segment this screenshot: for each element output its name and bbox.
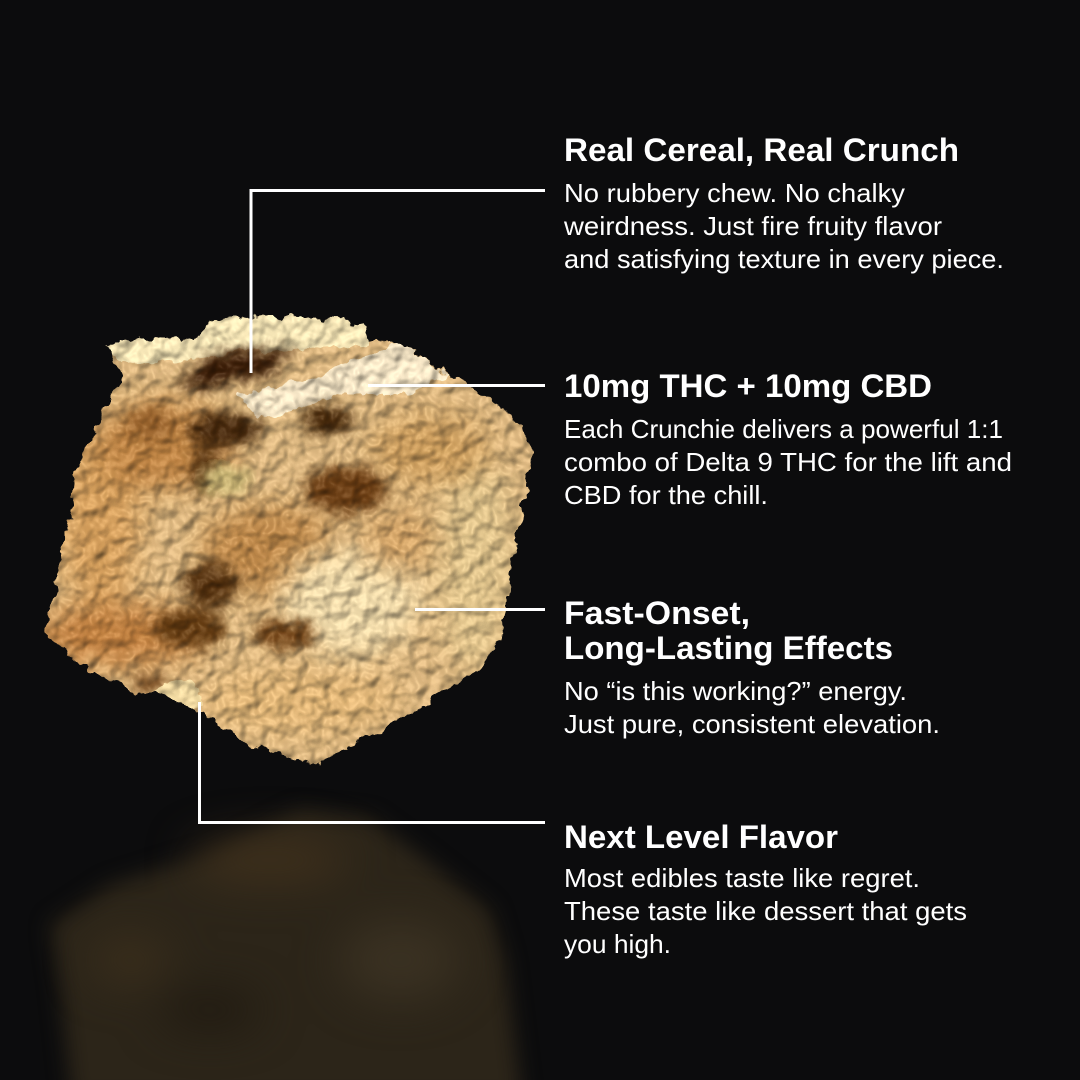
heading: fast onset: Long-Lasting Effects — [564, 630, 893, 666]
heading: next level flavor: Next Level Flavor — [564, 819, 838, 855]
body: thc cbd: Each Crunchie delivers a powerful 1:1 — [564, 414, 1003, 444]
blurred cereal reflection — [50, 810, 522, 1080]
body: real cereal: weirdness. Just fire fruity flavor — [563, 211, 942, 241]
body: fast onset: No “is this working?” energy. — [564, 676, 907, 706]
body: fast onset: Just pure, consistent elevation. — [564, 709, 940, 739]
cereal piece — [44, 313, 534, 766]
body: fast onset — [564, 676, 940, 739]
heading: thc cbd: 10mg THC + 10mg CBD — [564, 368, 932, 404]
body: next level flavor: you high. — [564, 929, 671, 959]
body: real cereal: and satisfying texture in every piece. — [564, 244, 1004, 274]
body: next level flavor — [564, 863, 967, 959]
feature: next level flavor — [564, 819, 967, 959]
heading: fast onset — [564, 595, 893, 666]
feature: fast onset — [564, 595, 940, 739]
body: thc cbd: CBD for the chill. — [564, 480, 768, 510]
heading: fast onset: Fast-Onset, — [564, 595, 750, 631]
top flap — [100, 310, 370, 365]
leader lines — [200, 190, 545, 822]
body: real cereal — [563, 178, 1004, 274]
feature: real cereal — [563, 132, 1004, 274]
body: thc cbd: combo of Delta 9 THC for the lift and — [564, 447, 1012, 477]
body: next level flavor: These taste like dessert that gets — [564, 896, 967, 926]
heading: real cereal: Real Cereal, Real Crunch — [564, 132, 959, 168]
feature: thc cbd — [564, 368, 1012, 510]
body: thc cbd — [564, 414, 1012, 510]
body: real cereal: No rubbery chew. No chalky — [564, 178, 905, 208]
body: next level flavor: Most edibles taste like regret. — [564, 863, 920, 893]
